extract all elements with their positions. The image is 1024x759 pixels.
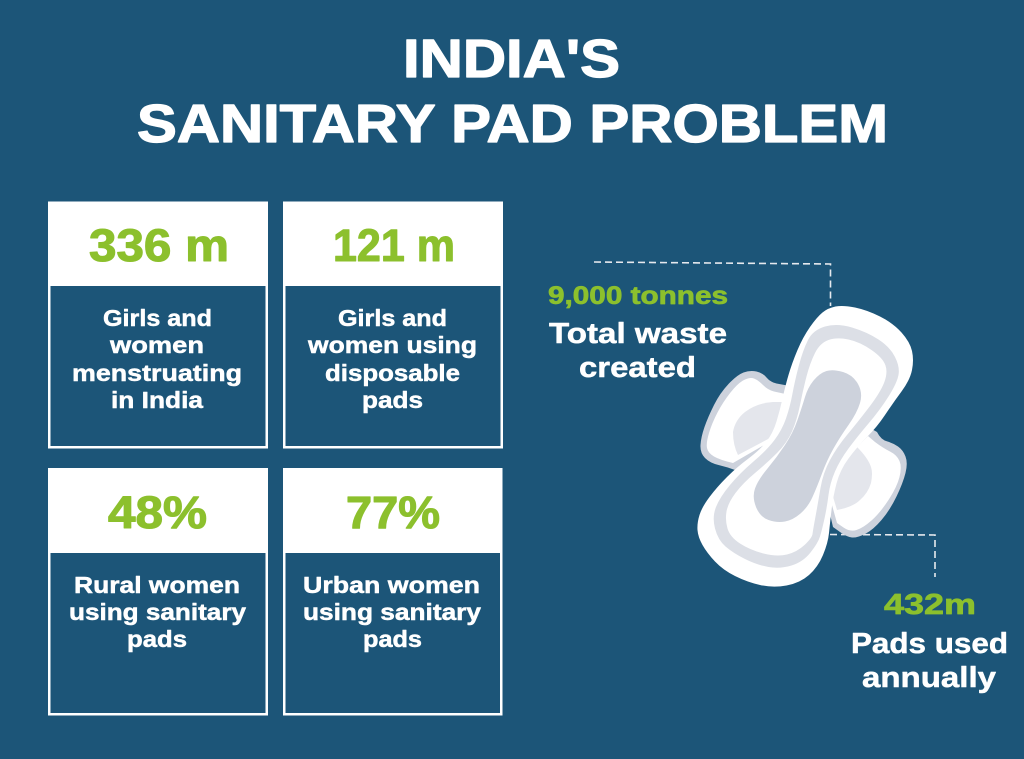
- left wing: [700, 371, 795, 470]
- title: INDIA'S: [403, 29, 620, 89]
- description: menstruating: in India: [111, 387, 203, 413]
- label: pads used annually: Pads used: [851, 628, 1008, 660]
- value: 9,000 tonnes: 9,000 tonnes: [548, 282, 728, 310]
- description: menstruating: [72, 305, 242, 413]
- title: [137, 29, 888, 154]
- title: SANITARY PAD PROBLEM: [137, 94, 888, 154]
- stat: 77%: 77%: [346, 487, 440, 538]
- description: urban: [303, 572, 481, 652]
- label: total waste created: [549, 318, 727, 384]
- panel: 77% urban women: [283, 468, 502, 716]
- stat: 48%: 48%: [108, 487, 207, 538]
- description: rural: [69, 572, 246, 652]
- connector: pad to annual usage callout: [830, 534, 935, 577]
- callout: total waste: [548, 282, 728, 384]
- description: menstruating: women: [109, 332, 204, 358]
- description: disposable: women using: [307, 332, 477, 358]
- callout: pads used annually: [851, 589, 1008, 694]
- label: pads used annually: [851, 628, 1008, 694]
- stat: 121 m: 121 m: [333, 220, 455, 271]
- description: urban: pads: [363, 626, 422, 652]
- connector: waste callout to pad: [594, 262, 830, 306]
- label: total waste created: Total waste: [549, 318, 727, 350]
- description: disposable: disposable: [325, 360, 460, 386]
- pad core: [754, 370, 861, 522]
- description: urban: Urban women: [303, 572, 480, 598]
- description: disposable: pads: [362, 387, 423, 413]
- description: rural: Rural women: [74, 572, 240, 598]
- description: rural: using sanitary: [69, 599, 246, 625]
- description: menstruating: Girls and: [103, 305, 212, 331]
- description: disposable: Girls and: [338, 305, 447, 331]
- pad inner white: [726, 338, 886, 556]
- panel: 336 m girls and women menstruating: [48, 202, 268, 448]
- description: disposable: [307, 305, 477, 413]
- pad grey ring: [714, 325, 899, 568]
- pad body: [697, 306, 913, 587]
- right wing: [822, 428, 907, 538]
- icon: sanitary pad: [697, 306, 913, 587]
- description: rural: pads: [127, 626, 187, 652]
- description: menstruating: menstruating: [72, 360, 242, 386]
- panel: 48% rural women: [48, 468, 268, 716]
- label: total waste created: created: [579, 352, 696, 384]
- panel: 121 m using disposable pads: [283, 202, 503, 448]
- value: 432m: 432m: [884, 589, 976, 621]
- description: urban: using sanitary: [303, 599, 481, 625]
- stat: 336 m: 336 m: [89, 220, 229, 271]
- label: pads used annually: annually: [862, 662, 996, 694]
